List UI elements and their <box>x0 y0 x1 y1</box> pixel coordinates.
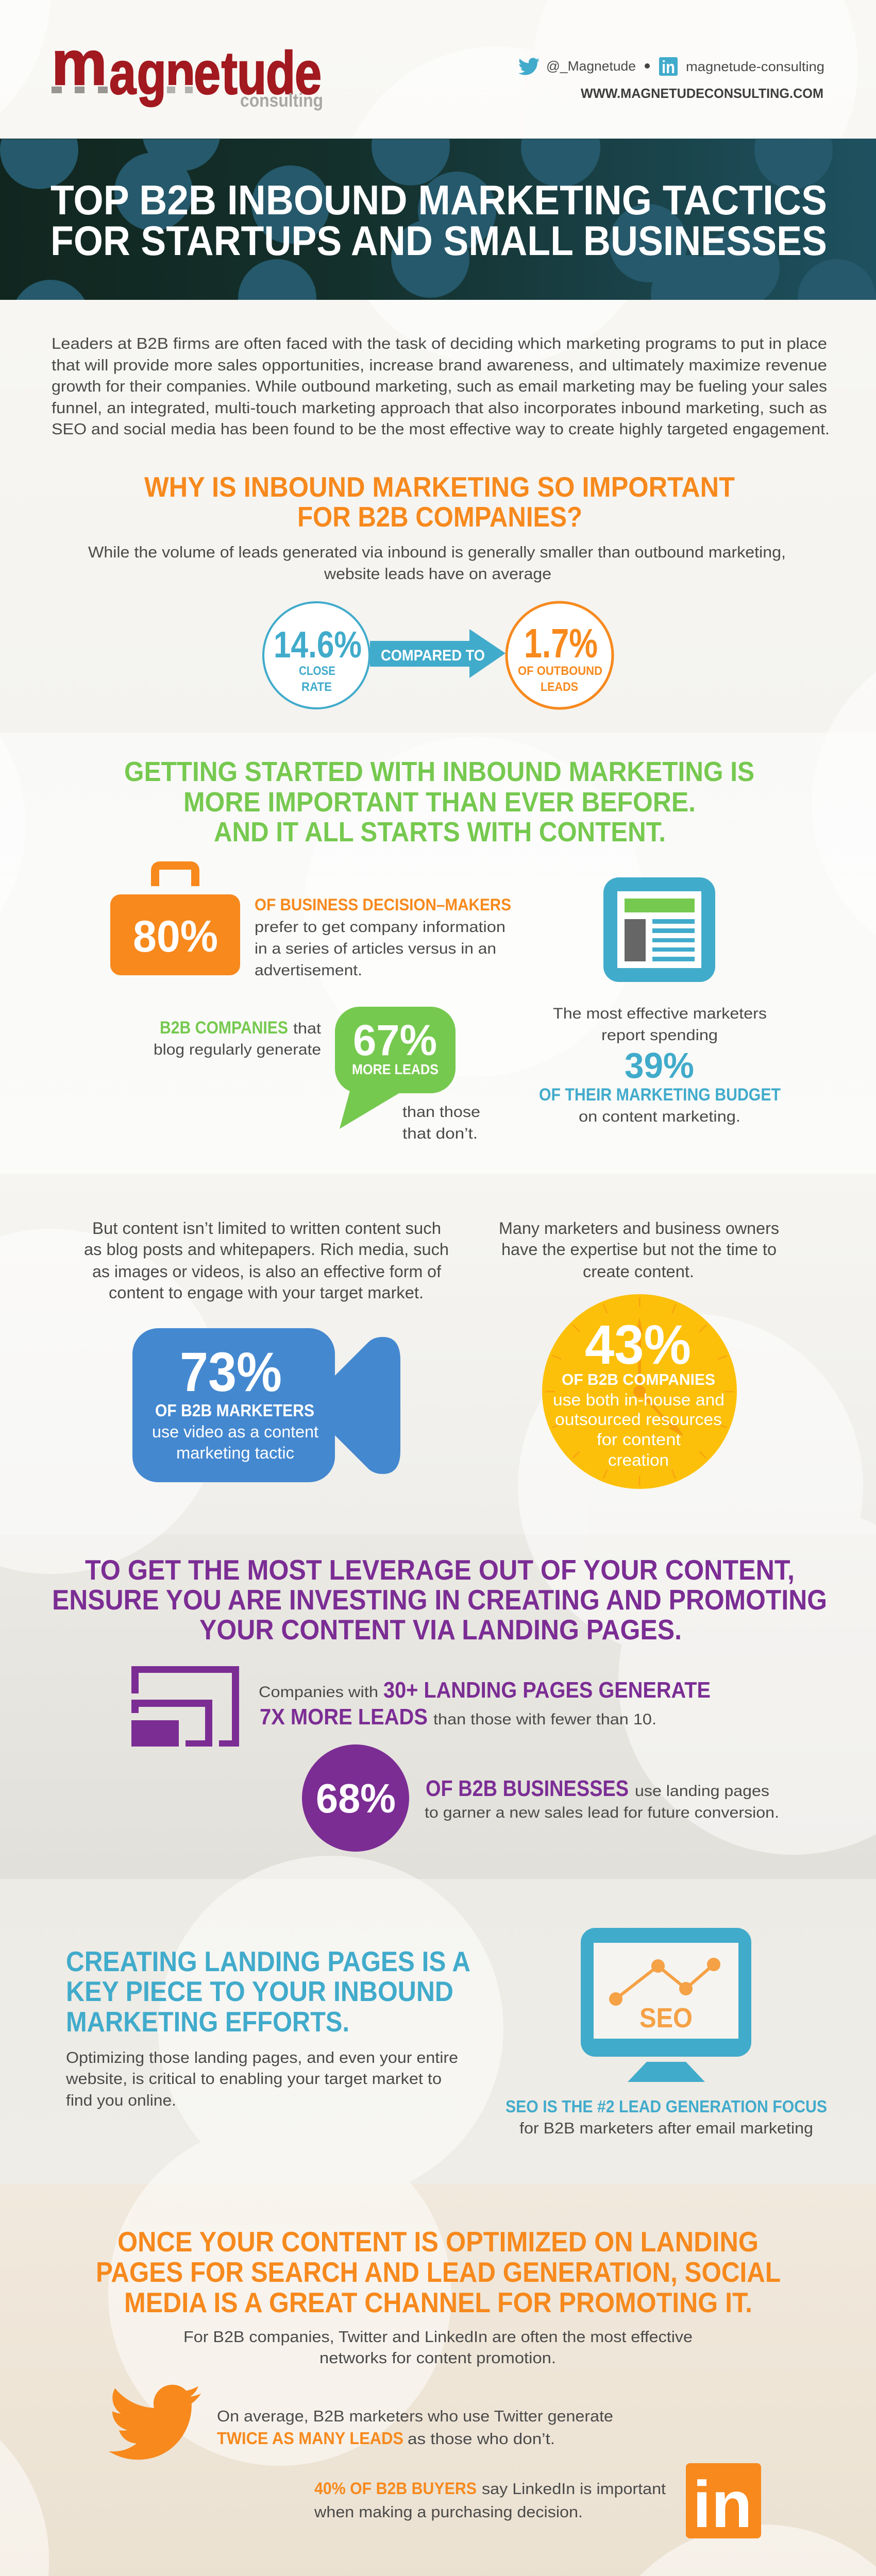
text: 30+ landing pages <box>259 1677 711 1730</box>
text: b2b companies blogging: that <box>293 1020 322 1037</box>
icon: newspaper <box>603 877 715 982</box>
text: leads intro: website leads have on average <box>324 565 551 583</box>
text: content marketing budget: on content marketing. <box>579 1108 740 1125</box>
text: content marketing budget: report spending <box>601 1027 718 1044</box>
text: b2b businesses: OF B2B BUSINESSES <box>426 1776 629 1801</box>
stat circle: outbound leads: 1.7% <box>524 620 598 666</box>
text: expertise not time: have the expertise but not the time to <box>501 1240 777 1259</box>
stat circle: close rate: 14.6% <box>274 624 362 666</box>
text: rich media: But content isn’t limited to written content such <box>92 1219 441 1238</box>
text: optimizing landing pages: Optimizing those landing pages, and even your entire <box>66 2048 458 2066</box>
text: decision makers: in a series of articles versus in an <box>255 940 496 957</box>
intro paragraph: SEO and social media has been found to be the most effective way to create highly targeted engagement. <box>52 420 830 438</box>
icon: clock with 43%: creation <box>608 1451 669 1469</box>
heading: why inbound <box>144 471 735 533</box>
heading: creating landing pages <box>66 1945 470 2038</box>
stat circle: close rate: CLOSE <box>299 664 335 678</box>
text: rich media: content to engage with your target market. <box>109 1283 424 1302</box>
stat circle: outbound leads: OF OUTBOUND <box>518 664 602 678</box>
text: seo lead generation <box>506 2097 827 2137</box>
text: content marketing budget: 39% <box>625 1045 694 1086</box>
icon: video camera with 73% <box>132 1328 400 1482</box>
text: linkedin stat: say LinkedIn is important <box>482 2480 666 2498</box>
icon: video camera with 73%: use video as a content <box>152 1422 318 1441</box>
text: decision makers: advertisement. <box>255 962 362 979</box>
stat circle: outbound leads <box>507 602 613 708</box>
icon: twitter bird large <box>109 2385 201 2460</box>
text: content marketing budget <box>539 1005 781 1125</box>
text: than those that don't: that don’t. <box>402 1125 478 1142</box>
title banner <box>0 139 876 300</box>
text: than those that don't: than those <box>402 1104 480 1121</box>
text: rich media <box>84 1219 449 1302</box>
text: b2b businesses: use landing pages <box>635 1783 769 1800</box>
heading: creating landing pages: CREATING LANDING PAGES IS A <box>66 1945 470 1977</box>
speech bubble: 67% more leads: MORE LEADS <box>352 1061 439 1077</box>
arrow: compared to <box>370 629 506 678</box>
stat circle: outbound leads: LEADS <box>541 680 578 694</box>
text: twitter stat: On average, B2B marketers who use Twitter generate <box>217 2407 613 2425</box>
text: content marketing budget: OF THEIR MARKETING BUDGET <box>539 1085 781 1105</box>
icon: clock with 43%: use both in-house and <box>553 1391 725 1409</box>
text: expertise not time: create content. <box>583 1262 694 1281</box>
icon: monitor with SEO chart <box>581 1928 751 2082</box>
icon: clock with 43%: outsourced resources <box>555 1410 722 1429</box>
heading: creating landing pages: KEY PIECE TO YOUR INBOUND <box>66 1975 453 2007</box>
text: optimizing landing pages: find you online. <box>66 2091 176 2109</box>
text: expertise not time <box>499 1219 779 1281</box>
text: effective networks <box>183 2328 693 2367</box>
text: optimizing landing pages: website, is critical to enabling your target market to <box>65 2070 442 2088</box>
heading: getting started: GETTING STARTED WITH INBOUND MARKETING IS <box>124 756 754 787</box>
text: 30+ landing pages: Companies with <box>259 1684 378 1701</box>
text: linkedin stat <box>314 2479 666 2521</box>
icon: monitor with SEO chart: SEO <box>639 2003 693 2033</box>
text: linkedin stat: 40% OF B2B BUYERS <box>314 2479 477 2498</box>
text: seo lead generation: for B2B marketers after email marketing <box>519 2119 813 2137</box>
speech bubble: 67% more leads: 67% <box>353 1016 437 1064</box>
intro paragraph: that will provide more sales opportunities, increase brand awareness, and ultimately maximize revenue <box>52 356 827 374</box>
header social links <box>518 57 824 101</box>
heading: getting started <box>124 756 754 848</box>
header logo: agnetude <box>109 40 322 107</box>
text: decision makers: prefer to get company information <box>255 919 506 936</box>
stat circle: close rate: RATE <box>301 680 332 694</box>
icon: briefcase with 80%: 80% <box>133 912 218 961</box>
heading: creating landing pages: MARKETING EFFORTS. <box>66 2006 349 2038</box>
text: optimizing landing pages <box>65 2048 458 2109</box>
heading: getting started: MORE IMPORTANT THAN EVER BEFORE. <box>183 787 696 818</box>
icon: video camera with 73%: OF B2B MARKETERS <box>155 1401 314 1420</box>
icon: landing pages <box>131 1666 239 1747</box>
twitter handle: @_Magnetude <box>546 58 636 74</box>
text: twitter stat <box>217 2407 613 2448</box>
heading: social media <box>96 2226 781 2318</box>
title <box>50 177 827 264</box>
intro paragraph: growth for their companies. While outbound marketing, such as email marketing may be fueling your sales <box>52 377 827 395</box>
header logo: m <box>52 28 107 98</box>
heading: social media: MEDIA IS A GREAT CHANNEL FOR PROMOTING IT. <box>124 2286 752 2318</box>
intro paragraph: Leaders at B2B firms are often faced with the task of deciding which marketing programs to put in place <box>52 334 827 352</box>
heading: why inbound: WHY IS INBOUND MARKETING SO IMPORTANT <box>144 471 735 503</box>
heading: social media: ONCE YOUR CONTENT IS OPTIMIZED ON LANDING <box>117 2226 759 2258</box>
arrow: compared to: COMPARED TO <box>381 647 485 664</box>
heading: why inbound: FOR B2B COMPANIES? <box>297 501 582 533</box>
icon: linkedin large: in <box>693 2468 752 2541</box>
text: leads intro <box>88 543 786 583</box>
icon: video camera with 73%: 73% <box>180 1341 282 1403</box>
speech bubble: 67% more leads <box>335 1007 456 1129</box>
heading: leverage content: TO GET THE MOST LEVERAGE OUT OF YOUR CONTENT, <box>85 1554 795 1586</box>
linkedin handle: magnetude-consulting <box>686 59 824 74</box>
text: b2b businesses <box>425 1776 779 1821</box>
intro paragraph <box>52 334 830 438</box>
text: leads intro: While the volume of leads generated via inbound is generally smaller than outbound marketing, <box>88 543 786 561</box>
text: b2b companies blogging: blog regularly generate <box>154 1041 321 1058</box>
text: twitter stat: as those who don’t. <box>408 2430 555 2448</box>
text: b2b businesses: to garner a new sales lead for future conversion. <box>425 1804 779 1821</box>
intro paragraph: funnel, an integrated, multi-touch marketing approach that also incorporates inbound marketing, such as <box>52 399 827 417</box>
text: 30+ landing pages: 30+ LANDING PAGES GENERATE <box>383 1677 711 1703</box>
stat circle: 68% <box>302 1744 409 1852</box>
text: seo lead generation: SEO IS THE #2 LEAD GENERATION FOCUS <box>506 2097 827 2116</box>
header logo: consulting <box>240 90 323 111</box>
icon: linkedin: in <box>662 58 675 77</box>
text: 30+ landing pages: than those with fewer than 10. <box>433 1711 656 1728</box>
icon: briefcase with 80% <box>110 866 240 975</box>
icon: clock with 43%: 43% <box>585 1313 691 1376</box>
stat circle: close rate <box>263 602 369 708</box>
icon: clock with 43% <box>542 1294 737 1489</box>
text: expertise not time: Many marketers and business owners <box>499 1219 779 1238</box>
text: effective networks: networks for content promotion. <box>319 2349 556 2367</box>
heading: getting started: AND IT ALL STARTS WITH CONTENT. <box>214 817 666 848</box>
website address: WWW.MAGNETUDECONSULTING.COM <box>581 86 823 101</box>
icon: video camera with 73%: marketing tactic <box>176 1444 294 1462</box>
text: b2b companies blogging <box>154 1018 322 1058</box>
text: b2b companies blogging: B2B COMPANIES <box>160 1018 288 1038</box>
text: twitter stat: TWICE AS MANY LEADS <box>217 2429 403 2448</box>
heading: leverage content: YOUR CONTENT VIA LANDING PAGES. <box>199 1614 682 1646</box>
title: TOP B2B INBOUND MARKETING TACTICS <box>50 177 827 224</box>
stat circle: 68%: 68% <box>316 1775 396 1821</box>
text: effective networks: For B2B companies, Twitter and LinkedIn are often the most effective <box>183 2328 693 2346</box>
text: 30+ landing pages: 7X MORE LEADS <box>260 1704 428 1730</box>
heading: social media: PAGES FOR SEARCH AND LEAD GENERATION, SOCIAL <box>96 2256 781 2288</box>
text: decision makers <box>255 895 511 979</box>
text: rich media: as blog posts and whitepapers. Rich media, such <box>84 1240 449 1259</box>
icon: clock with 43%: for content <box>597 1430 681 1449</box>
icon: twitter bird <box>518 58 540 75</box>
icon: clock with 43%: OF B2B COMPANIES <box>562 1370 715 1388</box>
text: decision makers: OF BUSINESS DECISION–MAKERS <box>255 895 511 914</box>
header logo <box>52 28 323 111</box>
heading: leverage content <box>52 1554 827 1646</box>
text: rich media: as images or videos, is also an effective form of <box>92 1262 441 1281</box>
text: content marketing budget: The most effective marketers <box>553 1005 767 1022</box>
text: than those that don't <box>402 1104 480 1142</box>
text: linkedin stat: when making a purchasing decision. <box>314 2503 583 2521</box>
